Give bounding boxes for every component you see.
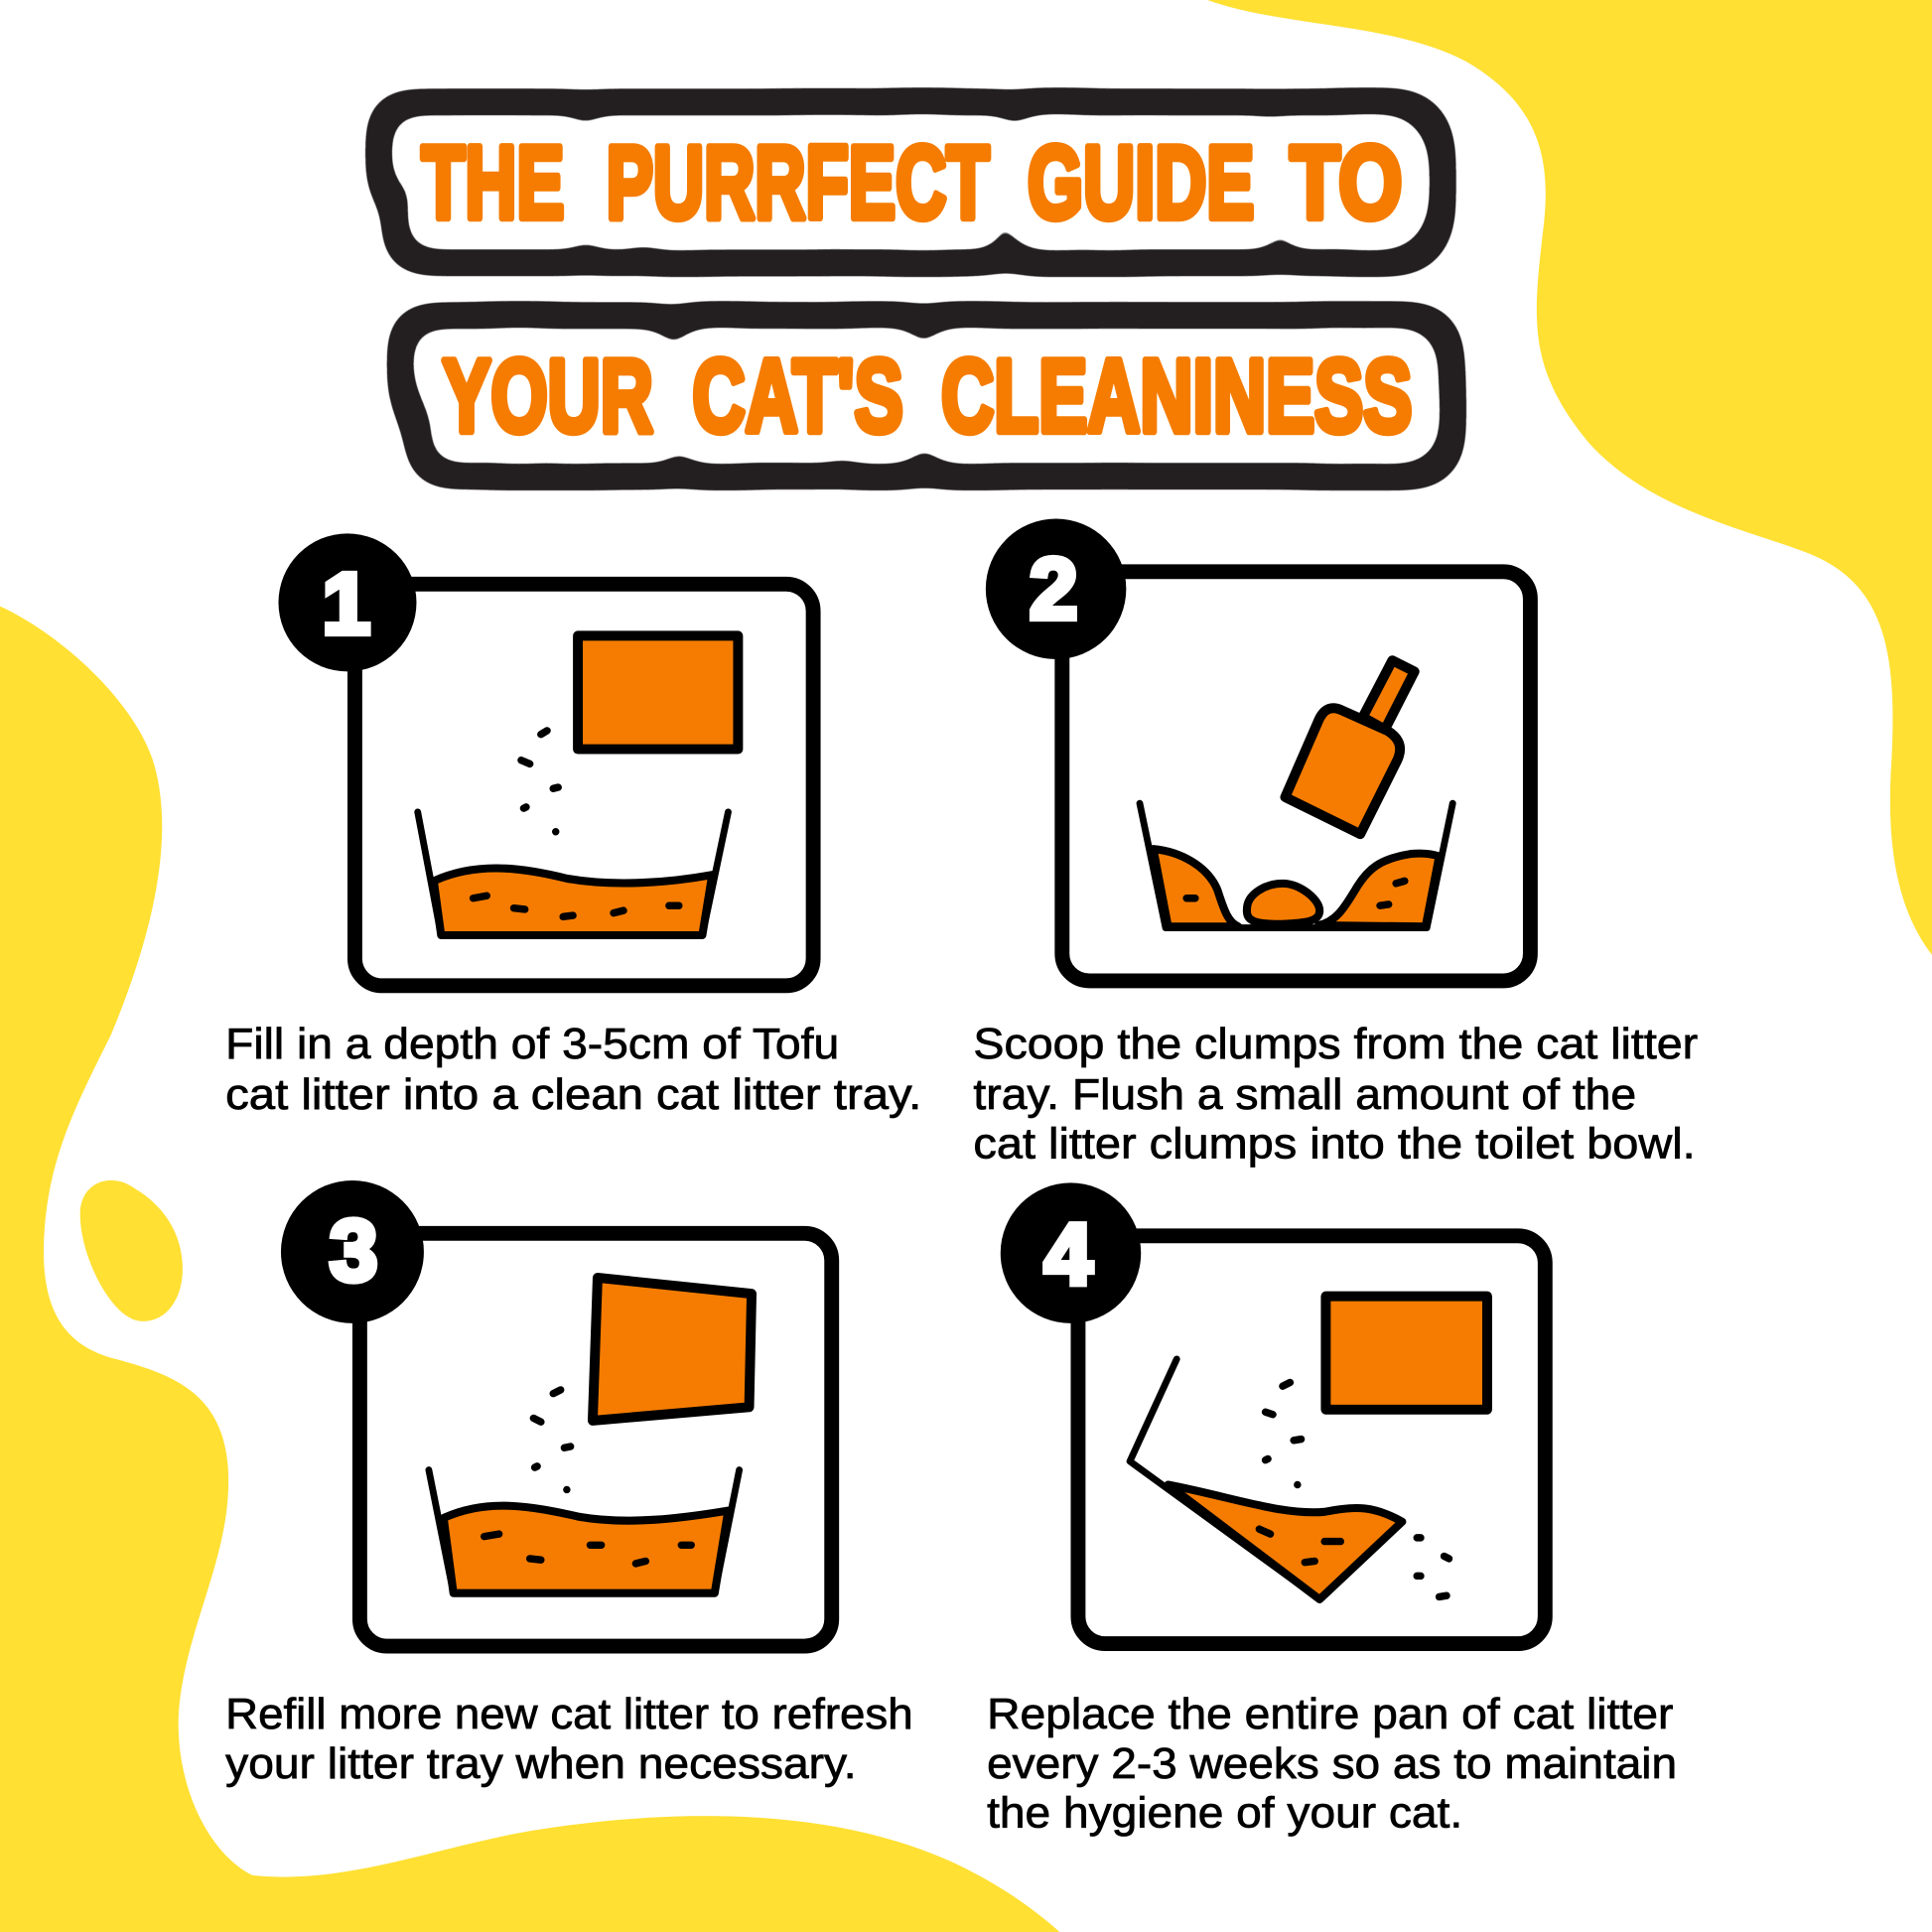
title: CAT'S: [692, 339, 903, 454]
caption: step 4: [987, 1691, 1677, 1838]
icon: falling litter: [533, 1390, 571, 1489]
number badge 3: [281, 1180, 424, 1323]
icon: tilted litter bag: [593, 1278, 752, 1421]
icon: tray with litter: [418, 812, 728, 935]
icon: tipped tray with litter: [1130, 1359, 1402, 1599]
caption: step 3: Refill more new cat litter to refresh: [225, 1691, 913, 1738]
caption: step 4: the hygiene of your cat.: [987, 1790, 1462, 1838]
icon: falling litter: [1266, 1382, 1302, 1484]
background blob: bottom left yellow: [0, 607, 1059, 1932]
caption: step 1: cat litter into a clean cat litter tray.: [225, 1071, 921, 1119]
title: CLEANINESS: [941, 339, 1412, 454]
title: GUIDE: [1028, 126, 1254, 241]
icon: tray with clumps: [1140, 803, 1452, 928]
caption: step 2: tray. Flush a small amount of the: [973, 1071, 1636, 1119]
panel: step 2: [986, 518, 1530, 981]
number badge 1: 1: [323, 556, 370, 652]
title: THE: [421, 126, 564, 241]
panel: step 1: [278, 533, 813, 986]
caption: step 3: [225, 1691, 913, 1788]
title: [421, 126, 1412, 454]
panel: step 3: [281, 1180, 832, 1646]
caption: step 2: [973, 1021, 1698, 1169]
number badge 2: 2: [1030, 541, 1077, 637]
caption: step 1: Fill in a depth of 3-5cm of Tofu: [225, 1021, 839, 1068]
title: TO: [1290, 126, 1402, 241]
number badge 1: [278, 533, 416, 671]
panel: step 4: [1001, 1182, 1545, 1644]
background blob: top right yellow: [1207, 0, 1932, 955]
icon: falling litter: [521, 731, 558, 832]
caption: step 4: Replace the entire pan of cat litter: [987, 1691, 1673, 1738]
caption: step 3: your litter tray when necessary.: [225, 1740, 857, 1788]
number badge 2: [986, 518, 1126, 659]
caption: step 4: every 2-3 weeks so as to maintain: [987, 1740, 1677, 1788]
icon: litter bag: [578, 635, 738, 750]
icon: litter bag: [1325, 1297, 1487, 1410]
number badge 4: 4: [1044, 1206, 1092, 1303]
icon: scoop: [1285, 660, 1415, 834]
title: YOUR: [443, 339, 653, 454]
caption: step 1: [225, 1021, 921, 1119]
number badge 4: [1001, 1182, 1141, 1323]
number badge 3: 3: [330, 1202, 377, 1299]
decorative yellow drop: [80, 1180, 183, 1321]
icon: spilled litter: [1417, 1538, 1449, 1596]
icon: tray with litter: [429, 1470, 740, 1593]
title: PURRFECT: [607, 126, 990, 241]
caption: step 2: cat litter clumps into the toilet bowl.: [973, 1121, 1696, 1169]
caption: step 2: Scoop the clumps from the cat litter: [973, 1021, 1698, 1068]
